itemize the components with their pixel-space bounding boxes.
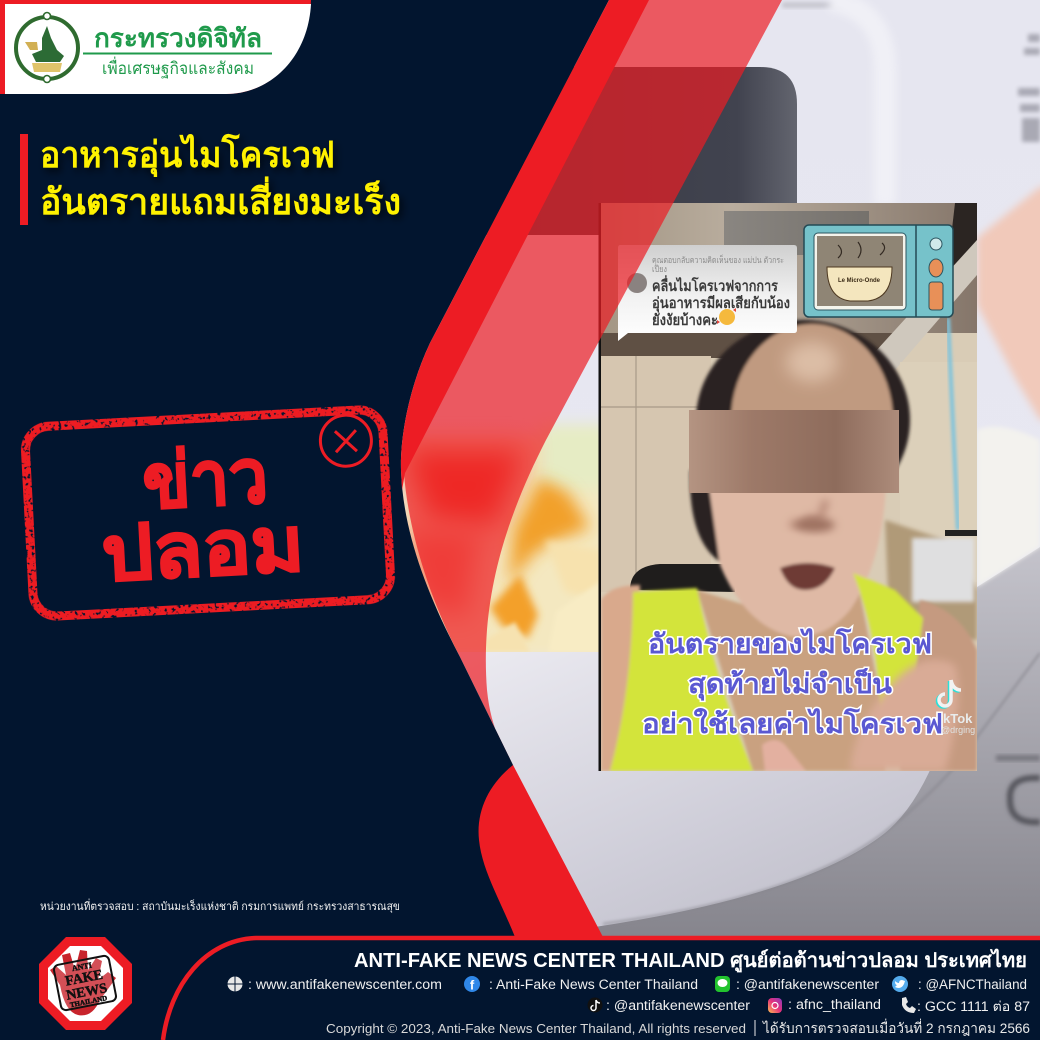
stamp frame: [24, 409, 392, 617]
video captions: [642, 627, 943, 739]
verification date: ได้รับการตรวจสอบเมื่อวันที่ 2 กรกฎาคม 2566: [762, 1019, 1030, 1036]
facebook handle: : Anti-Fake News Center Thailand: [489, 977, 698, 992]
anti-fake news badge: [39, 937, 132, 1030]
footer heading: ANTI-FAKE NEWS CENTER THAILAND ศูนย์ต่อต้านข่าวปลอม ประเทศไทย: [354, 948, 1027, 974]
stamp word 2: ปลอม: [100, 502, 306, 598]
ministry emblem: [16, 12, 78, 82]
video frame edge: [598, 203, 602, 771]
title accent bar: [20, 134, 28, 225]
anti-fake news badge: FAKE: [64, 968, 104, 990]
instagram handle: : afnc_thailand: [788, 997, 881, 1012]
contact row 2: [588, 997, 1030, 1014]
icon: twitter: [892, 976, 908, 992]
icon: globe: [228, 976, 242, 992]
tiktok watermark: kTok: [943, 711, 973, 726]
lower red shape: [479, 765, 603, 937]
title: [20, 133, 401, 225]
emoji: [717, 308, 736, 325]
title line 2: อันตรายแถมเสี่ยงมะเร็ง: [40, 176, 401, 222]
anti-fake news badge: NEWS: [65, 981, 109, 1004]
anti-fake news badge: ANTI: [71, 960, 93, 973]
comment line 2: อุ่นอาหารมีผลเสียกับน้อง: [652, 295, 790, 313]
stamp x icon: [319, 414, 373, 467]
woman: [601, 320, 977, 771]
fake news stamp: [24, 409, 392, 617]
video screenshot: [598, 203, 977, 771]
plate: [458, 652, 930, 926]
website: : www.antifakenewscenter.com: [248, 977, 442, 992]
background photo: microwave and food: [380, 0, 1040, 937]
title line 1: อาหารอุ่นไมโครเวฟ: [40, 133, 335, 178]
green rule: [83, 52, 272, 54]
footer: [0, 937, 1040, 1040]
solid red band: [401, 0, 649, 490]
hand: [50, 950, 116, 1015]
anti-fake news badge: THAILAND: [69, 994, 108, 1009]
caption line 2: สุดท้ายไม่จำเป็น: [688, 666, 893, 701]
twitter handle: : @AFNCThailand: [918, 977, 1027, 992]
phone number: : GCC 1111 ต่อ 87: [917, 999, 1030, 1014]
tiktok watermark: @drging: [941, 725, 975, 735]
ministry name: กระทรวงดิจิทัล: [94, 23, 262, 53]
food bowl: [402, 438, 598, 652]
icon: line: [715, 976, 730, 992]
icon: phone: [902, 997, 916, 1013]
caption line 1: อันตรายของไมโครเวฟ: [648, 627, 932, 659]
line handle: : @antifakenewscenter: [736, 977, 880, 992]
ministry subtitle: เพื่อเศรษฐกิจและสังคม: [102, 56, 254, 79]
copyright: Copyright © 2023, Anti-Fake News Center Thailand, All rights reserved: [326, 1022, 746, 1036]
comment line 1: คลื่นไมโครเวฟจากการ: [652, 275, 779, 295]
ministry logo header: [0, 0, 311, 94]
tiktok handle: : @antifakenewscenter: [606, 998, 751, 1013]
blur box: face: [689, 410, 899, 493]
translucent red band: [404, 0, 782, 765]
comment bubble: [618, 245, 797, 341]
icon: instagram: [768, 998, 782, 1013]
microwave sticker: [804, 225, 953, 317]
footer red curve: [163, 938, 1040, 1040]
avatar: [627, 273, 647, 293]
icon: facebook: f: [470, 978, 475, 992]
small comment heading: คุณตอบกลับความคิดเห็นของ แม่ปน ตัวกระ: [652, 254, 784, 266]
comment line 3: ยังงัยบ้างคะ: [652, 312, 718, 329]
caption line 3: อย่าใช้เลยค่าไมโครเวฟ: [642, 707, 943, 739]
icon: facebook: [464, 976, 480, 992]
contact row 1: [228, 976, 1027, 992]
small comment heading line 2: เปียง: [652, 264, 667, 274]
device body: [560, 547, 1040, 937]
stamp word 1: ข่าว: [141, 434, 270, 525]
tiktok watermark: [938, 680, 975, 735]
sticker label: Le Micro-Onde: [838, 278, 881, 284]
background objects: [885, 520, 977, 640]
navy left panel: [0, 0, 609, 937]
icon: tiktok: [588, 998, 602, 1012]
source credit: หน่วยงานที่ตรวจสอบ : สถาบันมะเร็งแห่งชาติ กรมการแพทย์ กระทรวงสาธารณสุข: [40, 898, 400, 913]
blur box: top: [724, 211, 869, 255]
